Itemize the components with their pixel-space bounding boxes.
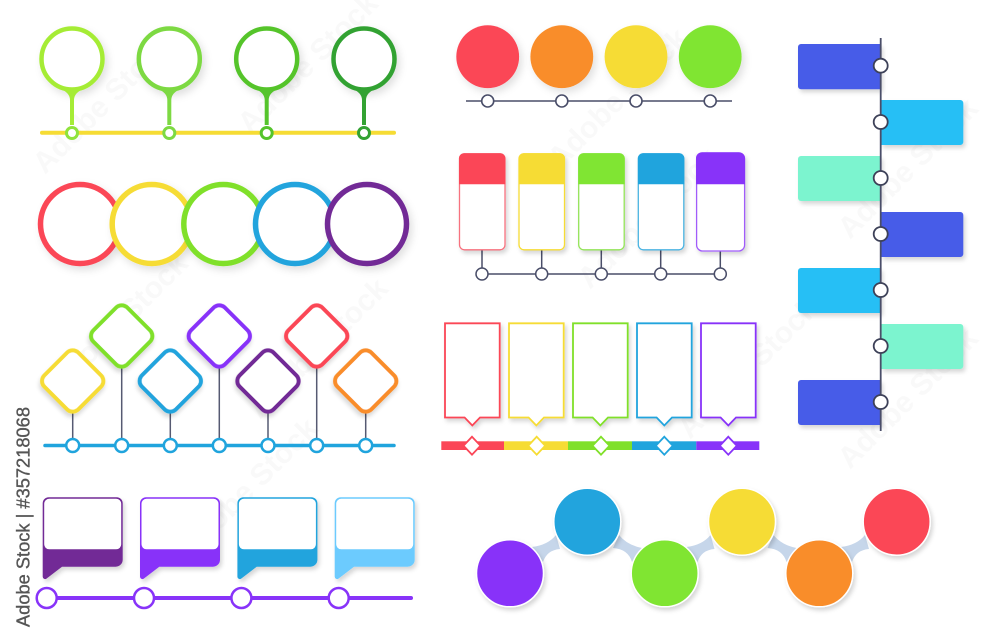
ring: purple bbox=[328, 184, 406, 264]
timeline line: yellow bbox=[42, 131, 394, 135]
stems bbox=[73, 366, 366, 445]
diamond: dark purple bbox=[234, 347, 302, 415]
timeline line: blue bbox=[45, 444, 394, 447]
bar diamonds bbox=[464, 437, 737, 455]
diamond: orange bbox=[332, 347, 400, 415]
panel: speech bubbles on violet timeline bbox=[37, 497, 415, 608]
circle: blue bbox=[554, 488, 621, 555]
timeline nodes bbox=[37, 588, 349, 608]
text: Adobe Stock bbox=[672, 292, 825, 445]
bubble: light blue bbox=[335, 497, 415, 579]
block 7: indigo left bbox=[798, 380, 881, 425]
timeline nodes bbox=[482, 95, 716, 107]
bubble: violet bbox=[140, 497, 220, 579]
block 5: sky left bbox=[798, 268, 881, 313]
circle: yellow bbox=[605, 25, 667, 88]
panel: overlapping ring chain bbox=[40, 184, 406, 264]
block 4: indigo right bbox=[881, 212, 963, 257]
pin 1 bbox=[42, 28, 102, 138]
circle: red bbox=[863, 488, 930, 555]
panel: pin boxes on multicolor bar bbox=[441, 323, 759, 455]
circle: green bbox=[631, 540, 698, 607]
ring: blue bbox=[256, 184, 334, 264]
card: violet bbox=[696, 152, 745, 251]
text: Adobe Stock bbox=[172, 412, 325, 565]
timeline line: violet bbox=[46, 596, 411, 600]
circle: red bbox=[456, 25, 519, 88]
timeline nodes bbox=[66, 439, 372, 452]
multicolor bar bbox=[441, 441, 759, 450]
block 6: mint right bbox=[881, 324, 963, 369]
panel: vertical timeline with alternating blocks bbox=[798, 38, 963, 431]
diamond: yellow bbox=[39, 347, 107, 415]
text: Adobe Stock bbox=[242, 272, 395, 425]
circle: orange bbox=[786, 540, 853, 607]
ring: red bbox=[40, 184, 120, 264]
stock id text: Adobe Stock | #357218068 bbox=[12, 407, 34, 627]
vertical line bbox=[880, 38, 882, 431]
connectors bbox=[482, 250, 720, 274]
panel: solid circles on thin timeline bbox=[456, 25, 742, 107]
diamond: green bbox=[88, 302, 156, 370]
timeline nodes bbox=[476, 268, 726, 280]
panel: pin circles on yellow timeline bbox=[42, 28, 394, 138]
connectors bbox=[532, 535, 869, 562]
ring: green bbox=[184, 184, 263, 264]
block 1: indigo left bbox=[798, 44, 881, 89]
card: red bbox=[459, 153, 505, 250]
text: Adobe Stock bbox=[42, 247, 195, 400]
text: Adobe Stock bbox=[832, 92, 985, 245]
block 2: sky right bbox=[881, 100, 963, 145]
thin timeline bbox=[466, 100, 732, 102]
circle: green bbox=[679, 25, 742, 88]
circle: yellow bbox=[708, 488, 776, 555]
bubble: blue bbox=[237, 497, 317, 579]
bubble: dark purple bbox=[43, 497, 123, 579]
panel: diamonds on blue timeline bbox=[39, 302, 400, 452]
block 3: mint left bbox=[798, 156, 881, 201]
panel: zigzag connected circles bbox=[476, 488, 930, 607]
text: Adobe Stock bbox=[572, 142, 725, 295]
card: green bbox=[578, 153, 625, 250]
box: violet bbox=[701, 323, 756, 426]
circle: violet bbox=[476, 540, 544, 607]
panel: header cards on thin timeline bbox=[459, 152, 745, 280]
box: blue bbox=[637, 323, 692, 426]
diamond: red bbox=[283, 302, 351, 370]
box: yellow bbox=[509, 323, 564, 426]
pin 3 bbox=[236, 28, 297, 138]
timeline nodes bbox=[874, 59, 888, 409]
text: Adobe Stock bbox=[27, 27, 180, 180]
pin 4 bbox=[334, 28, 394, 138]
diamond: blue bbox=[136, 347, 204, 415]
text: Adobe Stock bbox=[832, 322, 985, 475]
text: Adobe Stock bbox=[542, 22, 695, 175]
card: blue bbox=[638, 153, 684, 250]
box: red bbox=[445, 323, 500, 426]
card: yellow bbox=[519, 153, 565, 250]
ring: yellow bbox=[112, 184, 191, 264]
box: green bbox=[573, 323, 628, 426]
diamond: violet bbox=[185, 302, 253, 370]
circle: orange bbox=[530, 25, 593, 88]
pin 2 bbox=[139, 28, 200, 138]
